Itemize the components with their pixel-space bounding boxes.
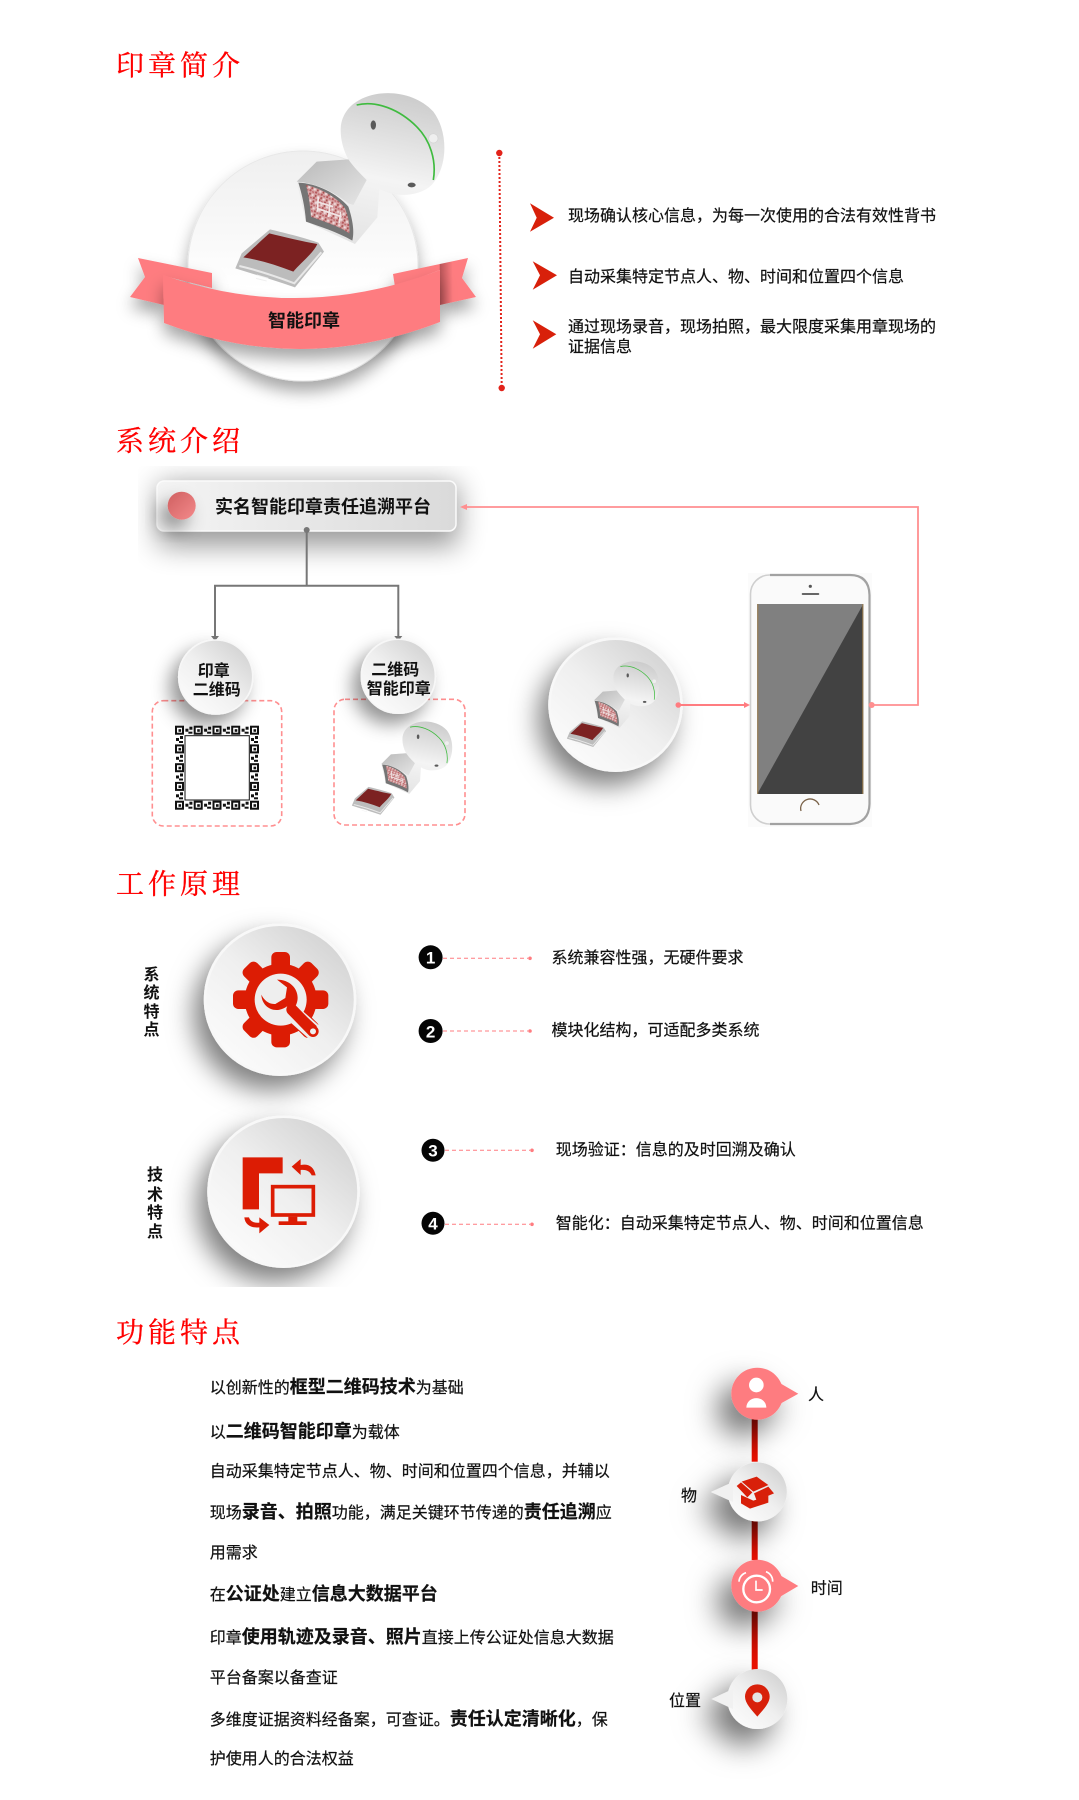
node: 时间 [731,1560,843,1612]
item 2: 2 [426,1022,435,1042]
text 2: 自动采集特定节点人、物、时间和位置四个信息 [568,268,904,286]
disc icon: monitor sync [208,1117,358,1267]
item 4 [422,1212,924,1235]
title: 功能特点: 功能特点 [116,1317,244,1349]
item 3 [422,1139,796,1162]
node: 人: 人 [808,1386,824,1404]
vertical label: 技术特点 [147,1165,163,1241]
item 2: 模块化结构，可适配多类系统 [552,1022,760,1040]
text 1: 现场确认核心信息，为每一次使用的合法有效性背书 [568,207,936,225]
vertical label: 系统特点: 点 [144,1020,160,1039]
node: 位置: 位置 [669,1692,701,1710]
connector: stamp to phone [676,702,750,708]
title: 工作原理: 工作原理 [116,868,244,900]
text block: function description [210,1377,614,1768]
item 1: 系统兼容性强，无硬件要求 [552,949,744,967]
text block: function description: 在公证处建立信息大数据平台 [210,1583,438,1604]
item 4: 4 [428,1214,438,1234]
text 3: 通过现场录音，现场拍照，最大限度采集用章现场的 [568,318,936,336]
badge: 印章二维码: 印章 [198,661,230,680]
node: 时间: 时间 [811,1580,843,1598]
vertical label: 系统特点 [144,965,160,1039]
badge: 印章二维码 [179,640,253,714]
badge: 二维码智能印章: 智能印章 [367,679,431,698]
connector: phone to platform [460,504,918,708]
node: 人 [731,1368,824,1420]
list: stamp introduction points [530,203,936,356]
badge: 二维码智能印章 [361,639,435,713]
timeline rod [752,1417,758,1462]
text block: function description: 以二维码智能印章为载体 [210,1420,400,1442]
ribbon left tail [130,258,212,305]
ribbon label: 智能印章 [268,310,340,331]
icon: arrow 2 [533,261,557,290]
item 1 [419,945,744,969]
connector: platform tree [211,527,402,641]
timeline rod 2 [752,1520,758,1560]
vertical label: 技术特点: 点 [147,1222,163,1241]
vertical label: 系统特点: 特 [144,1002,160,1021]
platform label: 实名智能印章责任追溯平台 [215,496,431,517]
title: 印章简介: 印章简介 [116,50,244,82]
icon: arrow 3 [533,320,556,349]
dotted vertical divider [496,150,505,391]
badge: 印章二维码: 二维码 [193,680,241,699]
node: 物: 物 [681,1487,697,1505]
item 3: 3 [428,1142,438,1160]
ribbon band [163,270,440,349]
node: 物 [681,1462,787,1522]
vertical label: 技术特点: 技 [147,1165,163,1184]
item 2 [419,1019,760,1043]
text block: function description: 多维度证据资料经备案，可查证。责任认定清晰化，保 [210,1708,608,1729]
text block: function description: 以创新性的框型二维码技术为基础 [210,1377,464,1397]
illustration: stamp in dashed box [352,722,452,815]
icon: platform dot [168,492,196,520]
item 3: 现场验证：信息的及时回溯及确认 [556,1141,796,1159]
panel: dashed box stamp [334,699,465,825]
illustration: smart stamp [235,93,444,287]
illustration: phone [748,573,872,827]
icon: arrow 1 [530,203,554,232]
text block: function description: 自动采集特定节点人、物、时间和位置四个信息，并辅以 [210,1462,610,1480]
text block: function description: 平台备案以备查证 [210,1669,338,1687]
title: 系统介绍: 系统介绍 [116,426,244,458]
timeline rod 3 [752,1610,758,1670]
big white disc [188,151,418,381]
disc icon: gear and wrench [205,925,355,1075]
badge: 二维码智能印章: 二维码 [371,660,419,679]
vertical label: 技术特点: 术 [147,1186,163,1204]
text block: function description: 用需求 [210,1544,258,1562]
item 1: 1 [426,948,435,968]
list: system features [419,945,924,1235]
panel: dashed box QR [152,701,282,826]
text block: function description: 现场录音、拍照功能，满足关键环节传递的责任追溯应 [210,1501,612,1522]
text block: function description: 印章使用轨迹及录音、照片直接上传公证处信息大数据 [210,1626,614,1647]
vertical label: 系统特点: 系 [144,965,160,984]
node: 位置 [669,1669,787,1729]
vertical label: 技术特点: 特 [147,1203,163,1222]
panel: stamp illustration with ribbon [130,93,476,381]
item 4: 智能化：自动采集特定节点人、物、时间和位置信息 [556,1214,924,1232]
panel: platform bar [157,481,458,546]
vertical label: 系统特点: 统 [144,983,160,1002]
ribbon right tail [393,258,476,305]
text block: function description: 护使用人的合法权益 [210,1750,354,1768]
disc with stamp [550,639,682,771]
text 3: 证据信息 [568,338,632,356]
QR frame code [175,726,259,810]
